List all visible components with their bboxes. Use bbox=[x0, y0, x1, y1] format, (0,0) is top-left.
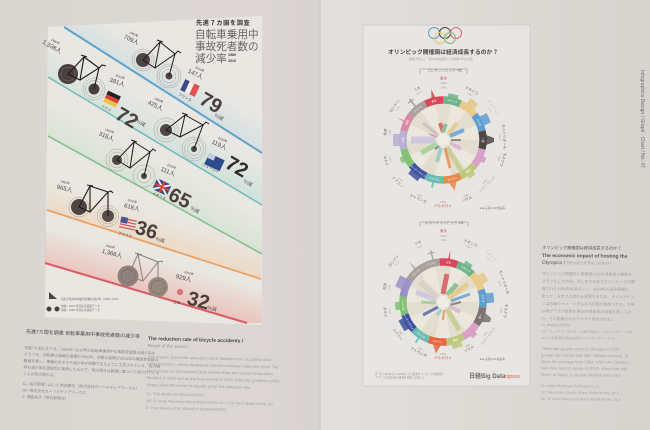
city labels: バルセロナ bbox=[434, 203, 452, 208]
city labels: アテネ bbox=[382, 154, 390, 167]
bars bbox=[411, 123, 464, 172]
bike: United States: %減 bbox=[154, 235, 166, 245]
right caption: These bar graphs express changes in GDP bbox=[541, 346, 620, 352]
bike: New Zealand: %減 bbox=[242, 178, 254, 188]
bike: Germany: 381人 bbox=[108, 77, 126, 89]
panel: Olympic infographic bbox=[363, 25, 530, 386]
chart label: 1964 bbox=[440, 238, 447, 242]
left caption: Japanese: CL: 毎日新聞 / AD, D: 前田直也（株式会社カーツメディアワークス） bbox=[23, 381, 140, 391]
left caption: Japanese: ことが読み取れる。 bbox=[23, 371, 57, 377]
city labels: モントリオール bbox=[501, 124, 508, 150]
bike: United Kingdom: 2010年 bbox=[166, 162, 177, 170]
city labels: 1988 bbox=[462, 192, 469, 199]
city labels: メキシコ bbox=[463, 238, 478, 248]
ring names: 日本 bbox=[446, 260, 452, 265]
city labels: 1988 bbox=[464, 342, 471, 349]
legend: ■ ■ 実質GDP成長率 bbox=[480, 357, 505, 361]
city labels: 2012 bbox=[395, 104, 402, 112]
bike: New Zealand: 1980年 bbox=[154, 95, 164, 104]
skyline icons bbox=[395, 249, 494, 354]
bike: France: 2010年 bbox=[195, 64, 205, 73]
city labels: 2016 bbox=[415, 89, 423, 96]
title bbox=[195, 19, 259, 65]
title: 減少率 bbox=[195, 52, 227, 65]
city labels: ミュンヘン bbox=[484, 248, 500, 265]
ring names: アメリカ bbox=[415, 331, 426, 340]
ring names: メキシコ bbox=[446, 98, 458, 104]
left caption: English: fatalities in 1980 and on the front wheels in 2010. Even the gradients of the bbox=[147, 375, 280, 383]
chart: post-Olympic radial bbox=[381, 220, 511, 361]
footer notes and logos: 日経Big Data bbox=[469, 372, 506, 380]
colored ring bbox=[386, 245, 500, 359]
city labels: 1980 bbox=[499, 307, 504, 314]
left caption: English: riding bicycles in seven developed countries between 1980 and 2010. The bbox=[147, 361, 279, 369]
city labels: 1996 bbox=[416, 192, 424, 198]
city labels: 1996 bbox=[417, 346, 424, 352]
city labels: ロサンゼルス bbox=[480, 326, 497, 346]
ring names: 中国 bbox=[401, 137, 405, 143]
city labels: ロンドン bbox=[388, 254, 400, 268]
city labels: 1984 bbox=[481, 178, 489, 185]
city labels: 北京 bbox=[382, 128, 388, 136]
ring names: ギリシャ bbox=[401, 300, 406, 311]
city labels: 2004 bbox=[387, 155, 393, 163]
bike: New Zealand: 72 bbox=[222, 152, 252, 182]
city labels: モスクワ bbox=[502, 303, 509, 319]
chart label: 1964 bbox=[440, 86, 447, 90]
city labels: 2000 bbox=[397, 176, 404, 183]
city labels: モントリオール bbox=[498, 269, 511, 295]
bike: United States: 2010年 bbox=[127, 197, 138, 204]
right caption: CL: Nikkei Business Publications, Inc. bbox=[541, 384, 601, 389]
left caption: English: The reduction rate of bicycle accidents / bbox=[148, 336, 244, 345]
city labels: シドニー bbox=[392, 328, 404, 342]
left caption: Japanese: 先進7カ国に比べる、1980年−2010年の自転車乗用中の事故死者数の減少率を bbox=[24, 345, 156, 356]
bike: United States: 618人 bbox=[123, 202, 140, 213]
chart label: 東京 bbox=[440, 228, 447, 233]
title: 自転車乗用中 bbox=[195, 28, 259, 41]
city labels: 1992 bbox=[440, 352, 446, 356]
ring names bbox=[401, 260, 485, 344]
bike: Japan: 1980年 bbox=[105, 242, 116, 250]
right caption: CL: 株式会社日経BP bbox=[541, 322, 571, 327]
city labels: 1980 bbox=[496, 155, 502, 162]
ring names: アメリカ bbox=[429, 176, 440, 182]
bike: Japan: 日本 bbox=[173, 299, 181, 305]
bike: France: 1980年 bbox=[129, 29, 139, 38]
bike: Germany: 2010年 bbox=[115, 72, 126, 80]
heading: オリンピック開催国は経済成長するのか？ bbox=[388, 48, 498, 56]
city labels: アトランタ bbox=[409, 346, 428, 358]
right caption: グラフ化した作品。はじめて日本でオリンピックが開 bbox=[542, 278, 635, 284]
bike: Japan bbox=[101, 242, 217, 315]
bike: United States bbox=[56, 178, 166, 245]
city labels: ソウル bbox=[463, 344, 475, 354]
bike: United Kingdom: %減 bbox=[189, 205, 201, 215]
chart label: 2020 bbox=[440, 81, 447, 85]
city labels: リオ bbox=[413, 85, 422, 93]
city labels bbox=[381, 238, 511, 360]
chart label: 東京 bbox=[440, 76, 447, 80]
inner dial bbox=[406, 266, 480, 338]
icon: Olympic rings bbox=[428, 28, 462, 44]
bike: Germany: 1,338人 bbox=[41, 39, 63, 55]
legend: 前輪：2010 年自転車道路データ bbox=[61, 304, 100, 308]
bike: France: フランス bbox=[178, 91, 193, 103]
title: 2010 bbox=[228, 59, 236, 63]
footer notes and logos bbox=[376, 372, 521, 380]
right caption: Olympics / Result of the search bbox=[542, 260, 611, 267]
right page background bbox=[320, 0, 650, 430]
city labels: リオ bbox=[414, 239, 422, 246]
ring names bbox=[401, 98, 485, 182]
left caption: Japanese: グラフ化。自転車の後輪の面積が1980年、前輪の面積が2010年の事故死者数の bbox=[24, 351, 159, 362]
ring names: 韓国 bbox=[452, 337, 459, 343]
bars bbox=[416, 274, 470, 330]
legend bbox=[46, 292, 120, 312]
city labels: シドニー bbox=[391, 176, 404, 189]
bike: New Zealand bbox=[147, 94, 254, 188]
ring names: 韓国 bbox=[465, 168, 472, 174]
city labels: 1976 bbox=[497, 280, 503, 287]
title: 先進７カ国を調査 bbox=[196, 19, 251, 27]
ring names: スペイン bbox=[447, 176, 458, 182]
bike: Japan: 929人 bbox=[175, 273, 192, 284]
city labels: 1972 bbox=[487, 106, 494, 113]
bike: Germany: 1980年 bbox=[50, 37, 61, 46]
right caption: The economic impact of hosting the bbox=[542, 253, 628, 260]
right caption: CD: アレックス・ザバティン(株式会社カーツメディアワークス) bbox=[541, 328, 632, 334]
right caption: return to Tokyo, a circular timeline was used. bbox=[541, 372, 622, 378]
city labels: 1968 bbox=[466, 91, 473, 98]
city labels: ロンドン bbox=[389, 99, 401, 113]
legend: 後輪：1980 年自転車道路データ bbox=[61, 308, 100, 312]
bike: France: 709人 bbox=[122, 34, 140, 47]
ring names: メキシコ bbox=[460, 264, 471, 274]
right caption: 戻ってくるまでの流れを表現するため、タイムライン bbox=[542, 293, 634, 299]
ring names: カナダ bbox=[481, 294, 485, 303]
ring names: オーストラリア bbox=[410, 164, 426, 179]
right caption: AD, D: 前島直紀 (株式会社カーツメディアワークス) bbox=[541, 335, 615, 341]
footer notes and logos: 1964年から2020年までの夏季オリンピック開催国の bbox=[383, 372, 444, 376]
city labels: 2000 bbox=[398, 329, 405, 337]
bike: New Zealand: 119人 bbox=[210, 139, 228, 152]
left caption: English: Result of the search bbox=[148, 343, 188, 349]
right caption: り、その結果がわかりやすく提示された。 bbox=[541, 316, 615, 322]
city labels: 1976 bbox=[498, 134, 502, 141]
city labels: 1992 bbox=[440, 200, 446, 204]
bike: United Kingdom: 65 bbox=[165, 184, 195, 214]
right caption: growth rate before and after Olympic hosting. To bbox=[541, 352, 629, 358]
title: 事故死者数の bbox=[195, 40, 259, 53]
right caption: オリンピック開催前と開催後のGDP成長率の推移を bbox=[542, 271, 632, 277]
page fold bbox=[320, 0, 321, 430]
bike: New Zealand: 425人 bbox=[147, 99, 164, 112]
bike: United Kingdom: 1980年 bbox=[104, 126, 115, 135]
bike: France bbox=[122, 28, 226, 122]
city labels: ソウル bbox=[461, 194, 473, 203]
right caption: には五輪のイメージでもある円型が採用された。中央 bbox=[541, 301, 635, 307]
footer notes and logos: GDP成長率の推移を国別に比較した bbox=[383, 376, 425, 380]
city labels: バルセロナ bbox=[434, 355, 452, 360]
ring names: カナダ bbox=[475, 118, 483, 127]
left caption: Japanese: DF: 株式会社カーツメディアワークス bbox=[22, 387, 86, 395]
bike: United States: 1980年 bbox=[60, 178, 71, 186]
bike: United Kingdom: 111人 bbox=[160, 166, 176, 178]
vertical section label: Infographics Design / Graph · Chart / No. 47 bbox=[639, 70, 645, 168]
chart label: 2020 bbox=[440, 234, 447, 238]
bike: United States: アメリカ bbox=[118, 230, 133, 239]
right caption: were first held in Japan, to 2020, when they will bbox=[541, 365, 627, 371]
right caption: 催された1964年を視点とし、2020年の東京開催に bbox=[542, 286, 629, 292]
bike: France: 147人 bbox=[187, 68, 204, 81]
left caption: Japanese: 斜も減少率を視覚的に表現したもので、坂の傾きは数値に基づいて描かれている bbox=[23, 364, 160, 375]
right caption bbox=[541, 244, 636, 402]
city labels: 1984 bbox=[482, 330, 489, 337]
left caption: English: E: Yuko Masuda (THE MAINICHI NEWSPAPERS) bbox=[146, 406, 226, 412]
bike: United Kingdom: イギリス bbox=[152, 190, 167, 201]
bike: New Zealand: 2010年 bbox=[217, 135, 228, 144]
bike: France: %減 bbox=[213, 112, 225, 122]
bike: Germany: %減 bbox=[135, 118, 147, 128]
city labels: 2008 bbox=[386, 284, 392, 291]
bike: Japan: 1,366人 bbox=[101, 248, 123, 260]
city labels: 2004 bbox=[387, 308, 392, 315]
city labels: 2008 bbox=[387, 129, 392, 136]
right caption: オリンピック開催国は経済成長するのか？ bbox=[542, 244, 622, 252]
ring names: ブラジル bbox=[413, 104, 423, 114]
left caption: English: slopes allow the viewer to visually grasp the reduction rate. bbox=[147, 382, 251, 390]
subheading: 開催7年以上「実GDP成長率」の前後4年の比較 bbox=[409, 56, 473, 61]
footer notes and logos: ingress bbox=[504, 374, 521, 380]
city labels: ロサンゼルス bbox=[478, 175, 497, 194]
legend: 自転車乗用中事故死者数の減少率（1980−2010） bbox=[61, 297, 120, 301]
city labels: ミュンヘン bbox=[487, 99, 500, 116]
left caption: Japanese bbox=[22, 328, 162, 405]
chart label bbox=[420, 220, 468, 242]
skyline icons bbox=[393, 89, 494, 192]
left caption: English: This graphic shows the reduction rate of fatalities from accidents while bbox=[147, 354, 272, 362]
ring names: イギリス bbox=[411, 267, 421, 278]
bike: Germany: 72 bbox=[112, 103, 142, 133]
legend: ■ ■ 実質GDP成長率 bbox=[480, 206, 505, 210]
ring names: スペイン bbox=[432, 339, 443, 344]
colored ring bbox=[387, 84, 499, 196]
ring names: ソ連 bbox=[481, 137, 485, 143]
chart label: プレオリンピック 4年 bbox=[427, 68, 463, 72]
bike: Japan: %減 bbox=[206, 304, 217, 313]
chart label: ポストオリンピック 4年 bbox=[425, 220, 464, 225]
right caption: AD, D: Naoki Maeshima (Kartz Media Works, Inc.) bbox=[541, 397, 621, 402]
city labels: 1972 bbox=[486, 256, 493, 263]
ring names: 英国 bbox=[404, 119, 410, 126]
right caption: CD: Alexander Zabatin (Kartz Media Works, Inc.) bbox=[541, 390, 618, 395]
left caption: Japanese: 数値を表し、車輪の大きさや減少率が把握できるように工夫されている。坂の傾 bbox=[24, 358, 160, 369]
right caption: の棒グラフが実質年度GDP成長率の結果を表してお bbox=[541, 308, 631, 314]
bike: United States: 965人 bbox=[56, 184, 73, 194]
city labels: アトランタ bbox=[409, 193, 428, 204]
right caption: show the passage from 1964, when the Olympics bbox=[541, 359, 630, 365]
bike: France: 79 bbox=[196, 88, 226, 118]
city labels: メキシコ bbox=[464, 85, 479, 96]
city labels: 2012 bbox=[394, 260, 401, 267]
panel: bicycle accident infographic bbox=[41, 16, 262, 325]
left caption: English: CL: THE MAINICHI NEWSPAPERS bbox=[146, 392, 204, 397]
city labels: 1968 bbox=[465, 244, 473, 250]
city labels bbox=[382, 85, 508, 208]
left caption: Japanese: E: 増島祐子（毎日新聞社） bbox=[22, 394, 69, 401]
inner dial bbox=[406, 104, 480, 176]
bike: Japan: 32 bbox=[185, 288, 212, 315]
city labels: 2016 bbox=[416, 244, 424, 250]
left page background bbox=[0, 0, 320, 430]
city labels: モスクワ bbox=[499, 152, 508, 168]
bike: Germany bbox=[41, 34, 147, 133]
ring names: ソ連 bbox=[477, 313, 483, 320]
chart: pre-Olympic radial bbox=[382, 68, 508, 210]
ring names: ブラジル bbox=[425, 260, 437, 267]
left caption: English bbox=[146, 336, 281, 413]
left caption: Japanese: 先進7カ国を調査 自転車乗用中事故死者数の減少率 bbox=[26, 328, 140, 340]
title: 1980 bbox=[228, 53, 236, 57]
city labels: 北京 bbox=[381, 282, 388, 290]
city labels: アテネ bbox=[382, 306, 389, 318]
chart label bbox=[420, 68, 467, 90]
bike: Germany: ドイツ bbox=[101, 104, 112, 113]
ring names: 東京 bbox=[431, 98, 437, 104]
left caption: English: black circles on the bicycles' back wheels show the number of accident bbox=[147, 368, 274, 376]
bike: New Zealand: ニュージー bbox=[202, 162, 220, 174]
left caption: English: AD: D: Naoki Maeshima (Kartz Media Works, Inc.) / DF: Kartz Media Works, Inc. bbox=[146, 399, 274, 406]
bike: United Kingdom: 316人 bbox=[98, 131, 115, 143]
bike: United States: 36 bbox=[133, 217, 160, 244]
ring names: オーストラリア bbox=[402, 313, 415, 331]
bike: United Kingdom bbox=[98, 125, 201, 215]
colored slope bands bbox=[45, 24, 262, 323]
bike: Japan: 2010年 bbox=[184, 269, 194, 276]
